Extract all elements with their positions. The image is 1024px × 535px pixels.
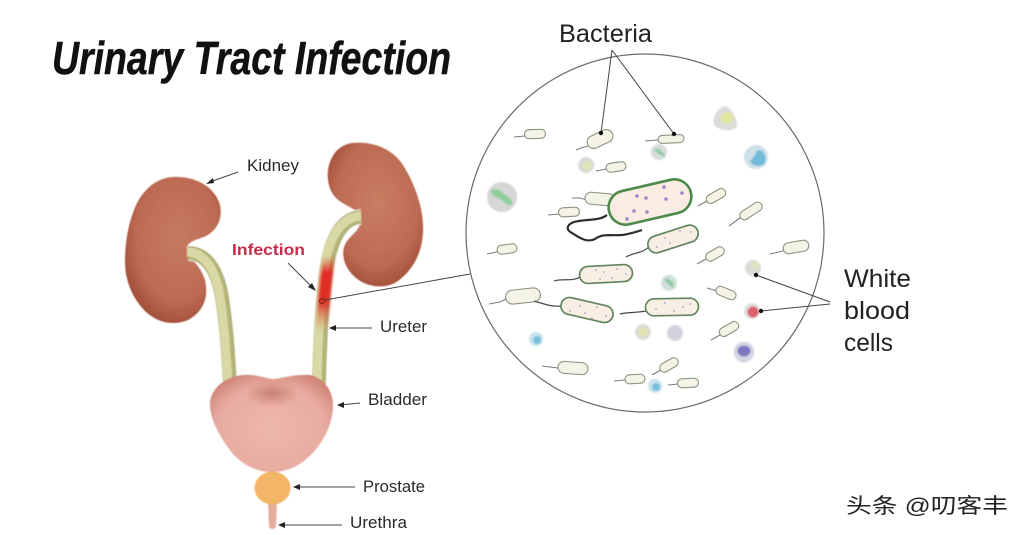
- label: Prostate: Prostate: [363, 478, 425, 496]
- label: Bacteria with pointers: Bacteria: [559, 20, 652, 48]
- label: Bacteria with pointers: [559, 20, 676, 136]
- label: Urethra: [278, 514, 408, 532]
- label: Ureter: [329, 318, 428, 336]
- label: Bladder: [337, 391, 428, 409]
- label: Kidney: [206, 157, 300, 184]
- bladder: [210, 375, 333, 472]
- urethra: [268, 500, 277, 529]
- magnified circle: [466, 54, 824, 412]
- urinary system anatomy: [125, 143, 423, 529]
- large bacterium with flagellum: [568, 176, 695, 240]
- large bacterium dots: [625, 185, 684, 221]
- label: Urethra: Urethra: [350, 514, 408, 532]
- label: Infection: Infection: [232, 242, 305, 259]
- small bacteria: [487, 127, 810, 388]
- label: White blood cells with pointers: blood: [844, 297, 910, 325]
- medium bacteria: [534, 223, 700, 324]
- watermark: 头条 @叨客丰: [846, 495, 1008, 518]
- left kidney: [125, 177, 221, 323]
- callout line to magnified view: [320, 274, 470, 304]
- medium bacteria dots: [569, 230, 692, 319]
- label: Bladder: Bladder: [368, 391, 428, 409]
- white blood cells: [487, 106, 768, 393]
- right ureter: [317, 216, 361, 384]
- infection red zone: [320, 217, 362, 384]
- title: Urinary Tract Infection: [52, 32, 451, 84]
- label: White blood cells with pointers: [754, 265, 911, 357]
- right kidney: [328, 143, 423, 286]
- bladder shading: [245, 379, 299, 407]
- label: Infection: [232, 242, 316, 291]
- label: Kidney: Kidney: [247, 157, 300, 175]
- label: Ureter: Ureter: [380, 318, 428, 336]
- label: White blood cells with pointers: White: [844, 265, 911, 293]
- left ureter: [187, 252, 230, 384]
- prostate: [254, 472, 290, 504]
- label: White blood cells with pointers: cells: [844, 329, 893, 357]
- label: Prostate: [293, 478, 425, 496]
